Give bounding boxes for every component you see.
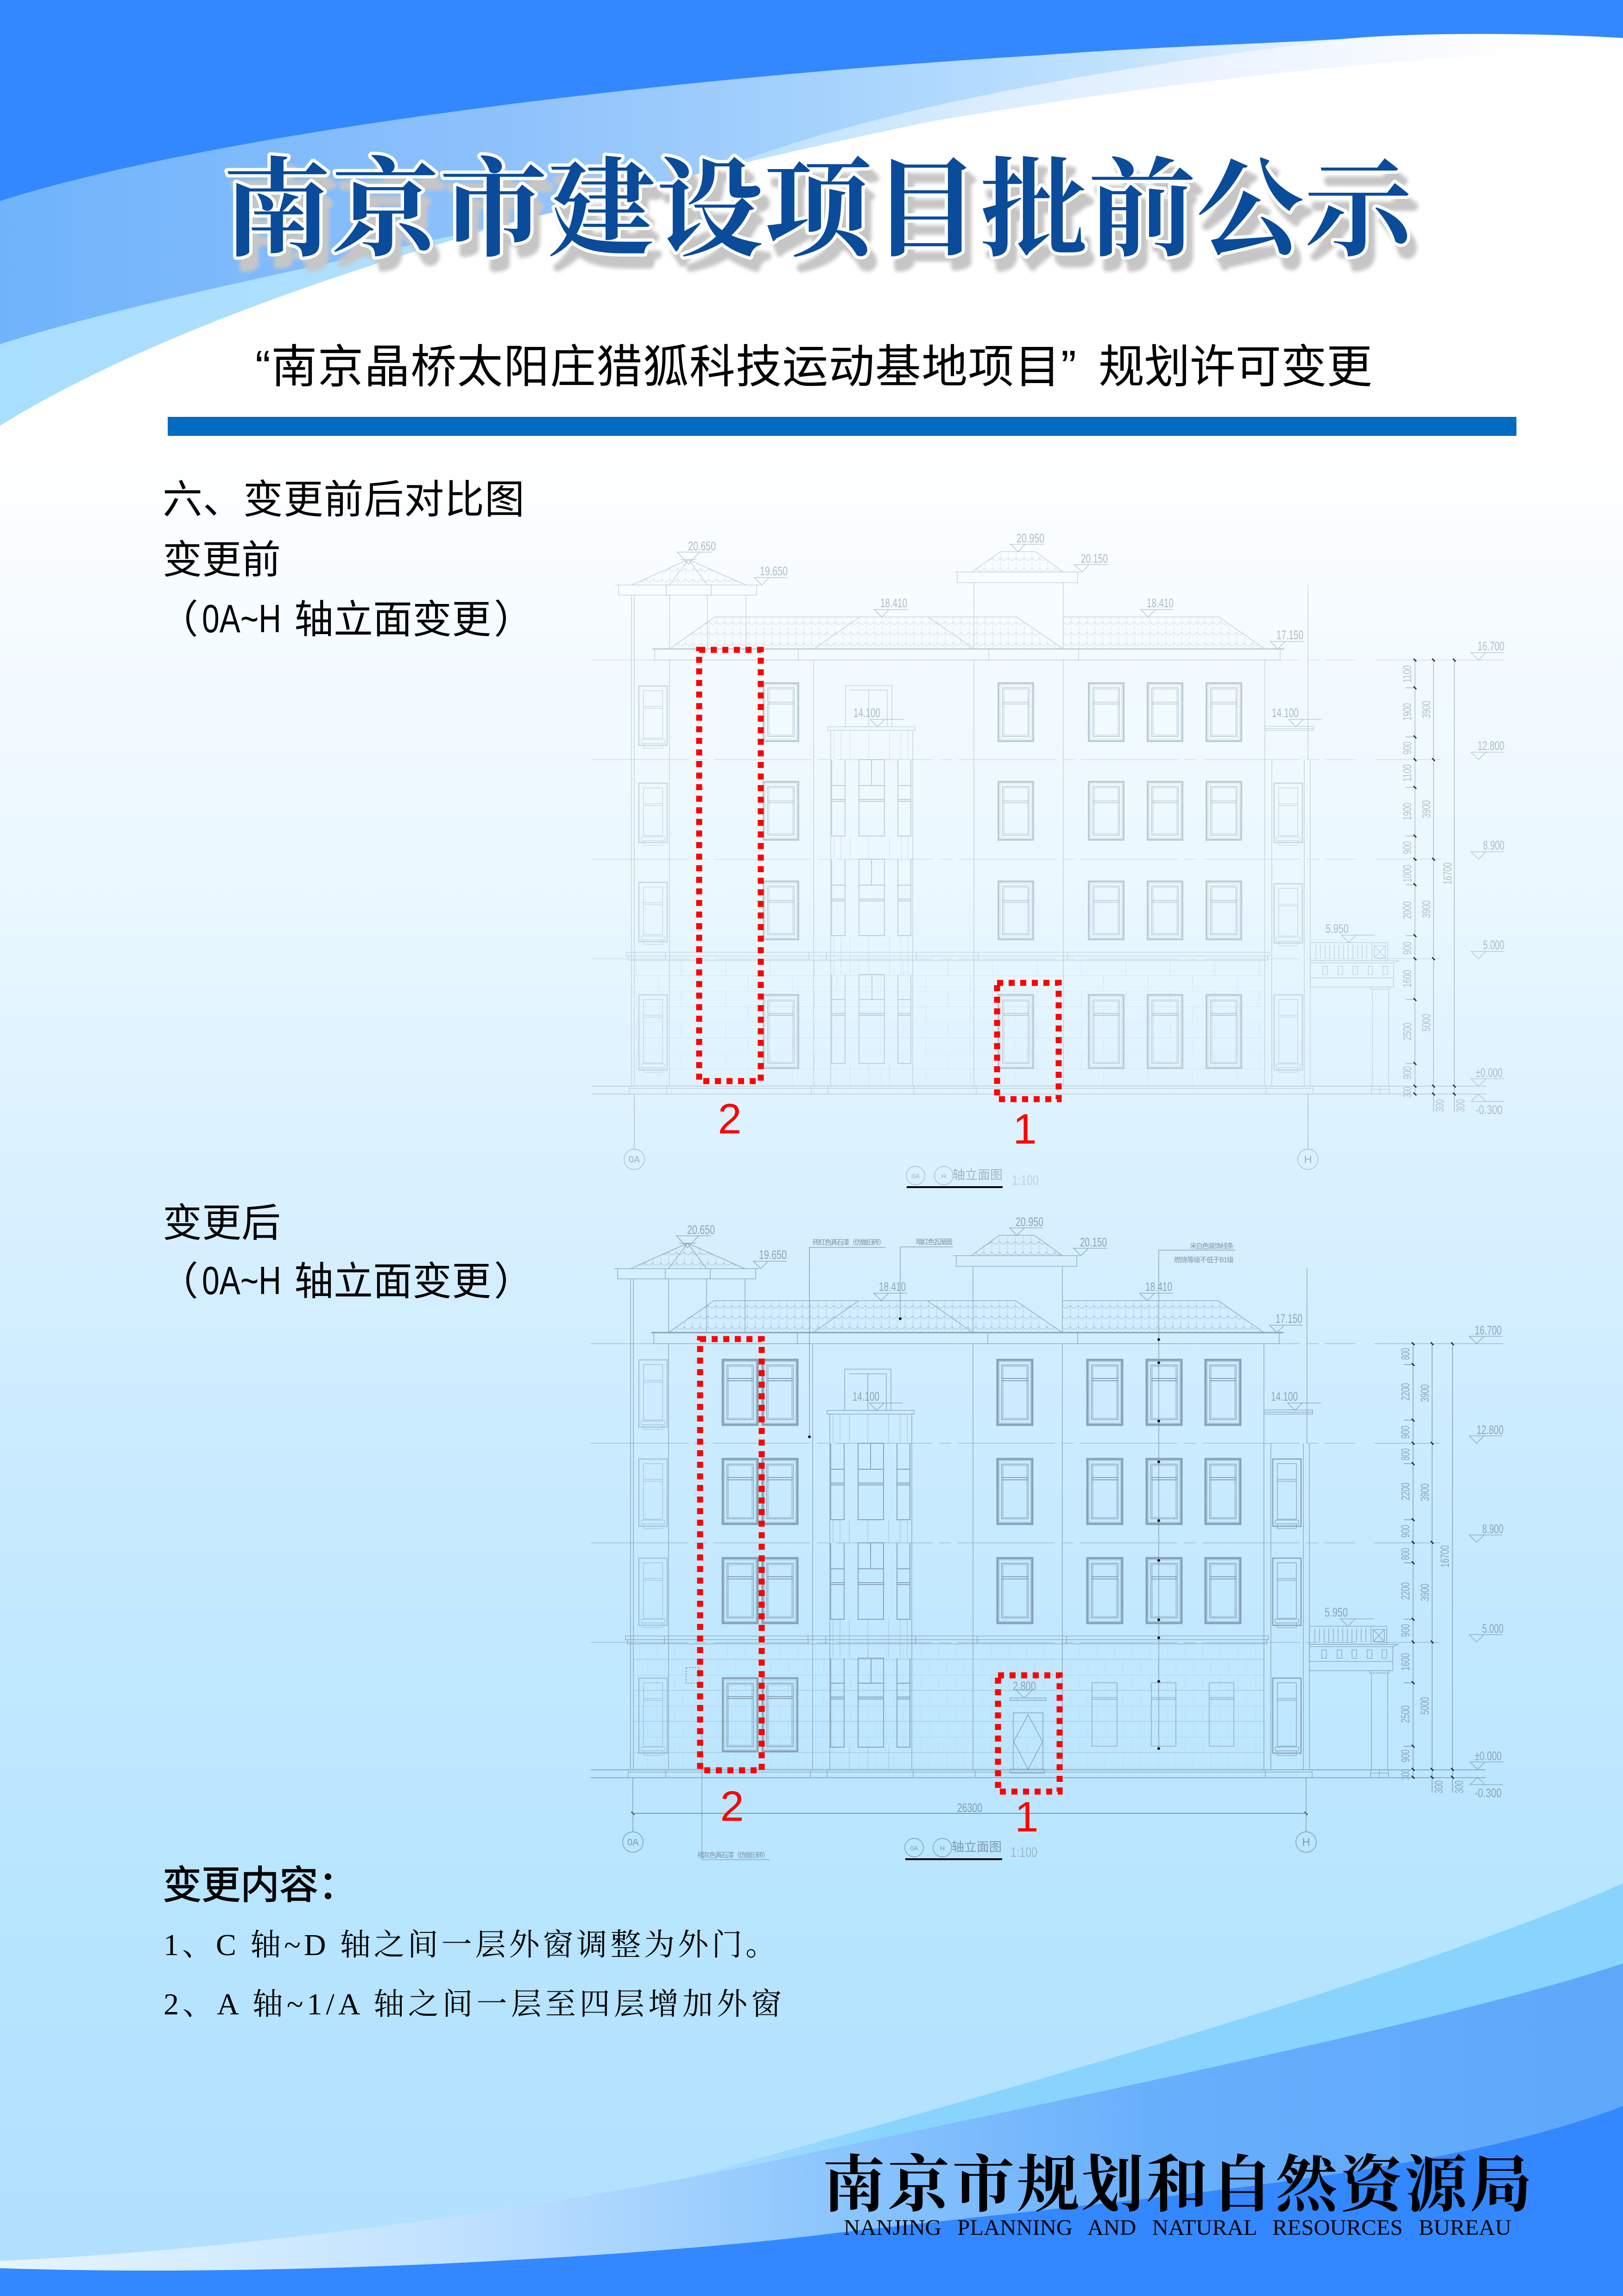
dimension labels: 3900 [1419,1484,1432,1501]
axis bubble labels: H [1304,1153,1312,1166]
title: 南京市建设项目批前公示 [223,151,1419,270]
dimension labels: 1100 [1401,764,1414,782]
dimension labels: 900 [1401,742,1414,755]
red dashed box 1: after [998,1675,1060,1792]
dimension labels: 3900 [1420,800,1433,818]
axis bubble labels [629,1153,1312,1180]
small vent [686,1667,699,1683]
door level label: 2.800 [1013,1679,1036,1693]
dimension labels: 900 [1401,1066,1414,1079]
label: after axis caption: 0A~H [202,1259,281,1303]
dimension labels: 300 [1401,1087,1414,1098]
dimension labels [1399,1348,1466,1793]
level labels: 5.000 [1482,1622,1503,1636]
windows [639,683,1302,1072]
label: before change: 变更前 [163,538,281,582]
red dashed box 2: after [700,1339,762,1770]
elevation drawing: after change [591,1215,1503,1860]
dimension labels: 900 [1401,841,1414,854]
level labels: -0.300 [1476,1103,1503,1117]
dimension labels: 2500 [1399,1705,1412,1723]
dimension labels: 800 [1399,1448,1412,1460]
title underline [905,1858,1002,1860]
dimension labels: 3900 [1420,900,1433,918]
overall width dimension [633,1813,1306,1814]
level labels: 18.410 [880,596,907,610]
axis bubbles [623,1777,1316,1857]
section heading: 六、变更前后对比图 [163,478,524,522]
axis bubble labels: 0A [911,1172,920,1180]
level labels: -0.300 [1475,1786,1502,1800]
label: after axis caption: ） [494,1260,533,1304]
level labels: 20.150 [1080,1235,1107,1249]
dimension labels: 2200 [1399,1383,1412,1401]
axis bubble labels: 0A [629,1155,640,1165]
dimension lines [1404,1344,1452,1793]
level labels: 18.410 [879,1280,906,1294]
red dashed box 1: before [997,983,1059,1099]
label: before axis caption: 轴立面变更 [294,598,491,642]
axis bubble labels: H [940,1844,945,1852]
subtitle: “南京晶桥太阳庄猎狐科技运动基地项目” [255,341,1076,392]
axis bubble labels: H [941,1172,946,1180]
level labels: 5.950 [1325,1605,1348,1619]
label: after change: 变更后 [163,1201,281,1246]
new exterior door [1010,1698,1046,1773]
dimension lines [1406,660,1454,1112]
label: before axis caption: （ [159,598,198,642]
dimension labels: 2200 [1399,1483,1412,1500]
dimension labels: 300 [1399,1769,1412,1780]
label: before axis caption: 0A~H [202,597,281,641]
level markers [677,544,1504,1101]
dimension labels: 16700 [1439,1545,1452,1567]
bottom swoosh: medium band [0,1963,1623,2296]
drawing title: 轴立面图 [953,1165,1003,1183]
footer: bureau name: 南京市规划和自然资源局 [823,2151,1532,2220]
level labels: 14.100 [1272,706,1299,720]
level labels: 17.150 [1276,1312,1302,1326]
leader dots [808,1317,1160,1750]
level labels: 5.000 [1483,938,1504,952]
dimension labels: 2000 [1401,901,1414,919]
blue divider bar [168,417,1516,436]
material annotations: 褐灰色真石漆（仿做旧砖） [697,1850,770,1860]
level labels: 20.650 [687,1223,715,1237]
change item 1: 1、C 轴~D 轴之间一层外窗调整为外门。 [164,1928,776,1962]
level labels: 14.100 [853,706,880,720]
subtitle: 规划许可变更 [1099,341,1372,392]
level labels: 19.650 [760,564,788,578]
level labels: 18.410 [1145,1280,1172,1294]
level labels: 20.150 [1081,552,1108,566]
callout number 1: 1 [1013,1106,1037,1153]
axis bubble labels: 0A [910,1844,918,1852]
level labels: 8.900 [1482,1522,1503,1536]
axis bubbles [624,1094,1318,1185]
dimension labels: 1900 [1401,703,1414,721]
level labels: ±0.000 [1476,1066,1503,1080]
callout number 2: 2 [718,1095,742,1143]
bottom swoosh: dark blue band [0,2106,1623,2296]
roof tiles [632,552,1265,649]
callout number 1: 1 [1015,1793,1039,1841]
building outline [592,552,1504,1094]
dimension labels: 900 [1399,1749,1412,1762]
dimension labels: 3900 [1420,701,1433,718]
level labels [688,531,1504,1117]
dimension labels: 3900 [1419,1384,1432,1402]
dimension labels: 2500 [1401,1023,1414,1040]
material annotations [697,1237,1234,1860]
label: before axis caption [159,597,533,642]
dimension labels [1401,665,1467,1112]
elevation drawing: before change [592,531,1504,1188]
level labels: 12.800 [1477,1423,1503,1437]
change item 2: 2、A 轴~1/A 轴之间一层至四层增加外窗 [164,1988,782,2021]
label: after axis caption [159,1259,533,1304]
stone coursing [634,960,1265,1086]
level labels: 18.410 [1147,596,1174,610]
top swoosh: medium band [0,0,1367,344]
door level marker [1016,1690,1032,1698]
dimension labels: 1900 [1401,803,1414,820]
dimension labels: 300 [1433,1780,1446,1793]
dimension ticks [1414,659,1456,1095]
level labels: 20.650 [688,539,716,553]
label: after axis caption: 轴立面变更 [294,1260,491,1304]
axis bubble labels: 0A [627,1837,639,1848]
level markers [676,1228,1503,1785]
ground floor small windows [1092,1683,1234,1746]
level labels: 14.100 [1271,1390,1298,1403]
stone coursing [633,1644,1264,1770]
footer: bureau English name: NANJING PLANNING AND NATURAL RESOURCES BUREAU [844,2215,1511,2240]
dimension labels: 1100 [1401,665,1414,683]
axis bubble labels: H [1302,1836,1310,1849]
dimension labels: 300 [1434,1099,1446,1112]
dimension labels: 2200 [1399,1582,1412,1600]
dimension labels: 1600 [1399,1653,1412,1671]
material annotations: 砖红色真石漆（仿做旧砖） [813,1237,885,1247]
material annotations: 暗红色瓦屋面 [916,1237,953,1246]
dimension labels: 300 [1454,1099,1467,1112]
drawing scale: 1:100 [1012,1173,1039,1188]
red dashed box 2: before [699,650,761,1081]
level labels: 14.100 [853,1390,879,1403]
dimension labels: 1000 [1401,865,1414,882]
dimension labels: 900 [1399,1624,1412,1637]
level labels [687,1215,1503,1800]
drawing scale: 1:100 [1010,1845,1037,1860]
dimension labels: 16700 [1441,862,1454,885]
annotation leader lines [702,1247,1235,1860]
change content heading: 变更内容： [163,1863,357,1907]
level labels: 16.700 [1475,1323,1502,1337]
dimension labels: 900 [1401,942,1414,955]
overall width label: 26300 [957,1801,982,1815]
drawing title: 轴立面图 [952,1837,1002,1855]
dimension labels: 800 [1399,1348,1412,1360]
dimension labels: 1600 [1401,970,1414,988]
level labels: 20.950 [1016,1215,1043,1229]
material annotations: 燃烧等级不低于B1级 [1174,1255,1234,1264]
dimension labels: 300 [1453,1780,1466,1793]
dimension labels: 5000 [1420,1014,1433,1032]
top swoosh: dark blue band [0,0,1623,201]
label: before axis caption: ） [494,598,533,642]
level labels: 12.800 [1478,739,1504,753]
level labels: 16.700 [1478,639,1504,653]
building outline [591,1235,1503,1778]
dimension labels: 800 [1399,1548,1412,1560]
dimension labels: 3900 [1419,1584,1432,1601]
level labels: 17.150 [1276,628,1303,642]
roof tiles [631,1235,1264,1333]
material annotations: 米白色装饰线条 [1190,1241,1234,1251]
dimension labels: 900 [1399,1525,1412,1538]
title underline [907,1186,1003,1188]
callout number 2: 2 [720,1783,744,1830]
dimension labels: 900 [1399,1426,1412,1439]
label: after axis caption: （ [159,1260,198,1304]
level labels: ±0.000 [1475,1749,1502,1763]
level labels: 5.950 [1326,922,1349,936]
bottom swoosh: light band [673,1883,1623,2296]
dimension ticks [632,1342,1454,1815]
level labels: 8.900 [1483,838,1504,852]
level labels: 20.950 [1017,531,1044,545]
top swoosh: light band [0,0,1623,426]
level labels: 19.650 [759,1248,787,1262]
dimension labels: 5000 [1419,1697,1432,1715]
axis bubble labels [627,1836,1310,1852]
windows [639,1360,1301,1755]
